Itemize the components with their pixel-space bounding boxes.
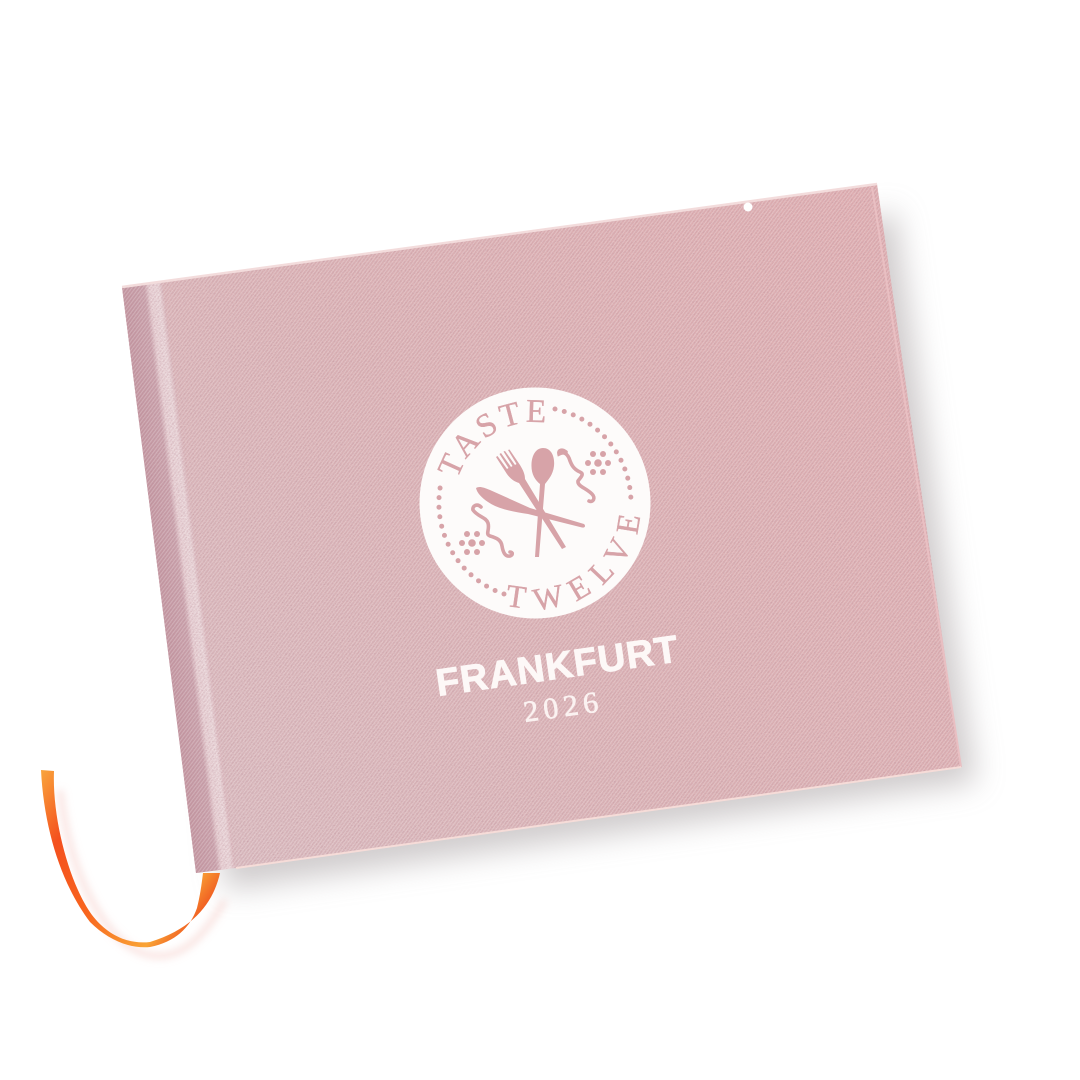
text: TASTE: TASTE — [437, 400, 545, 475]
book cover — [110, 170, 970, 880]
ornament: top right flourish — [559, 450, 594, 501]
book spine and hinge groove — [122, 282, 236, 873]
ornament: bottom left grape cluster — [459, 531, 485, 555]
icon: crossed fork, spoon and knife — [476, 448, 585, 557]
product photo: linen book — [41, 182, 986, 961]
spoon — [531, 448, 554, 557]
text: TWELVE: TWELVE — [508, 515, 640, 610]
orange ribbon bookmark — [41, 770, 225, 956]
book drop shadow — [190, 210, 976, 890]
ornament: bottom left flourish — [473, 505, 512, 556]
book cover: linen board — [122, 184, 961, 873]
fork — [496, 450, 566, 549]
white circle — [420, 388, 650, 618]
twill weave — [110, 170, 970, 880]
subtitle: 2026: 2026 — [521, 685, 605, 729]
linen texture — [110, 170, 970, 880]
medallion logo — [420, 388, 650, 618]
title: FRANKFURT: FRANKFURT — [433, 628, 682, 705]
knife — [476, 487, 585, 528]
small white dot on top edge — [744, 202, 752, 212]
cover edge highlights — [122, 184, 961, 868]
ornament: top right grape cluster — [585, 451, 611, 475]
dotted ring — [439, 409, 631, 594]
